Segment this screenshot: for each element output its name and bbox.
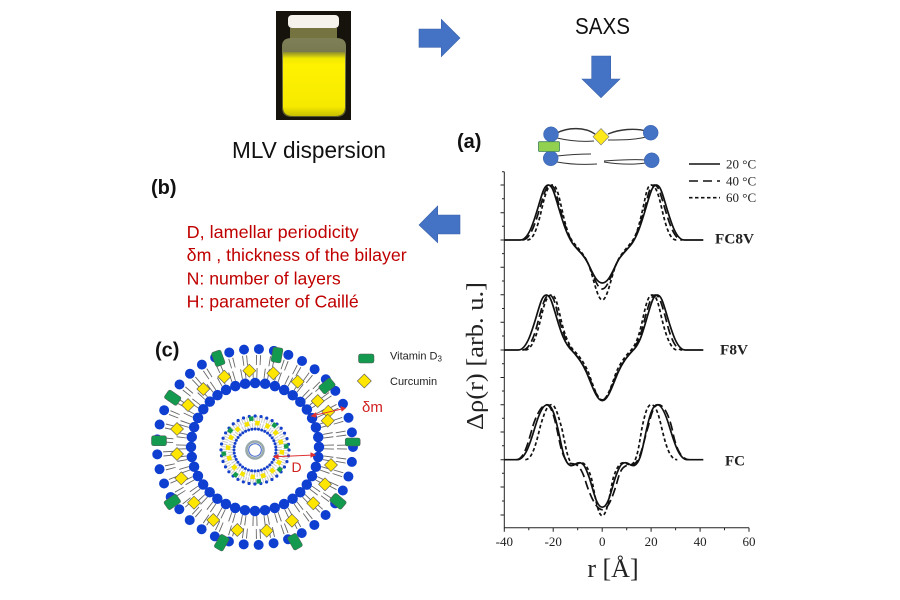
- label: SAXS: SAXS: [575, 13, 630, 39]
- x axis tick labels: 40: [694, 534, 707, 549]
- panel label (c): (c): [155, 340, 179, 362]
- curve group: F8V: [504, 295, 703, 401]
- chart legend: temperatures: 20 °C: [726, 156, 756, 172]
- series label: F8V: F8V: [720, 342, 748, 358]
- chart axes and ticks: [500, 172, 749, 532]
- x axis title: r [Å]: [587, 554, 639, 583]
- arrow: jar to SAXS: [419, 19, 460, 57]
- lipid tails: [168, 360, 342, 534]
- series label: FC8V: FC8V: [715, 232, 754, 248]
- dimension arrow: D: [274, 453, 315, 459]
- inner small vesicle: [221, 416, 289, 484]
- legend icon: vitamin D3: [358, 354, 374, 363]
- curve group: FC8V: [504, 185, 703, 300]
- panel label (a): (a): [457, 131, 481, 153]
- x axis tick labels: -20: [545, 534, 562, 549]
- x axis tick labels: -40: [496, 534, 513, 549]
- y axis title: Δρ(r) [arb. u.]: [463, 282, 489, 430]
- dimension label: δm: δm: [362, 399, 383, 416]
- x axis tick labels: 20: [645, 534, 658, 549]
- arrow: SAXS to chart: [582, 56, 620, 98]
- chart legend: temperatures: 40 °C: [726, 174, 756, 188]
- vitamin D3 molecules: [152, 347, 360, 552]
- x axis tick labels: [496, 534, 756, 549]
- line chart: electron density profiles: [463, 172, 756, 583]
- text block: fit parameters: H: parameter of Caillé: [187, 292, 359, 312]
- legend: molecules: [357, 350, 442, 388]
- legend icon: curcumin: [357, 374, 371, 388]
- chart legend: temperatures: [689, 156, 756, 205]
- icon: bilayer schematic: [538, 125, 659, 168]
- curcumin molecules: [170, 364, 338, 537]
- chart legend: temperatures: 60 °C: [726, 190, 756, 205]
- panel label (b): (b): [151, 177, 177, 199]
- legend label: vitamin D3: 3: [437, 354, 442, 364]
- text block: fit parameters: N: number of layers: [187, 268, 341, 288]
- label: MLV dispersion: MLV dispersion: [232, 137, 386, 163]
- series label: FC: FC: [725, 454, 745, 470]
- dimension label: D: D: [292, 459, 302, 475]
- legend label: curcumin: Curcumin: [390, 376, 437, 388]
- text block: fit parameters: δm , thickness of the bilayer: [187, 245, 407, 265]
- x axis tick labels: 0: [599, 534, 605, 549]
- photo: jar of MLV dispersion: [276, 11, 351, 120]
- dimension arrow: δm: [312, 407, 345, 417]
- diagram: multilamellar vesicle: [152, 347, 383, 552]
- lipid heads: [157, 349, 353, 545]
- curve group: FC: [504, 405, 703, 516]
- legend label: vitamin D3: Vitamin D: [390, 350, 437, 362]
- text block: fit parameters: D, lamellar periodicity: [187, 222, 359, 242]
- text block: fit parameters: [187, 222, 407, 312]
- x axis tick labels: 60: [742, 534, 756, 549]
- arrow: chart to parameters: [419, 206, 460, 243]
